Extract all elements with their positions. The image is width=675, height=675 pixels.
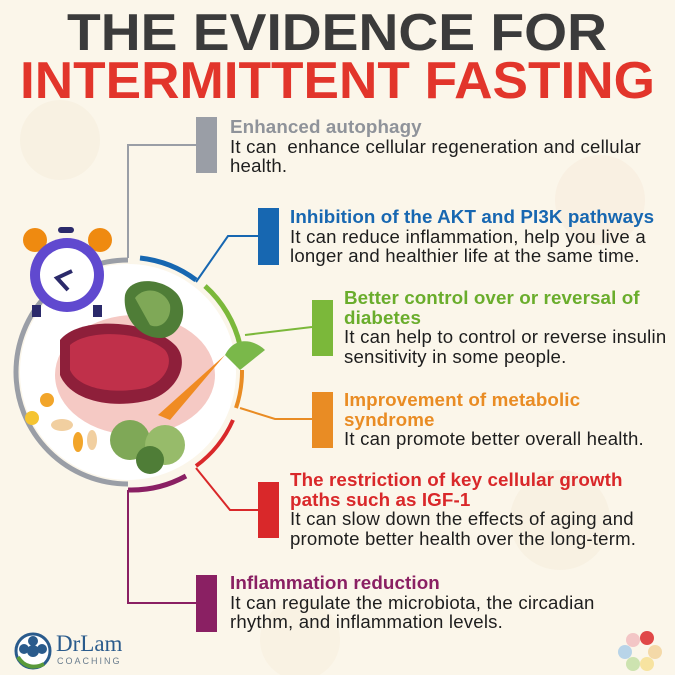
item: enhanced autophagy: It can enhance cellular regeneration and cellular [230, 136, 641, 156]
item: inflammation reduction [196, 572, 595, 632]
item: inflammation reduction: Inflammation reduction [230, 572, 440, 593]
icon: nuts [25, 393, 97, 452]
logo: DrLam Coaching [14, 631, 122, 670]
item: metabolic syndrome: syndrome [344, 408, 435, 430]
item: enhanced autophagy: health. [230, 155, 287, 176]
icon: brussels sprouts [110, 420, 185, 474]
item: diabetes: sensitivity in some people. [344, 346, 566, 366]
item: AKT PI3K: Inhibition of the AKT and PI3K pathways [290, 206, 654, 227]
item: metabolic syndrome: Improvement of metabolic [344, 389, 580, 410]
item: enhanced autophagy: Enhanced autophagy [230, 116, 422, 137]
title [20, 4, 655, 110]
item: AKT PI3K: It can reduce inflammation, help you live a [290, 226, 646, 246]
icon: flower logo [618, 631, 662, 671]
icon: meat [55, 315, 215, 435]
item: diabetes: Better control over or reversal of [344, 287, 640, 308]
item: AKT PI3K: longer and healthier life at the same time. [290, 245, 640, 266]
item: IGF-1: promote better health over the long-term. [290, 528, 636, 548]
logo: DrLam Coaching: DrLam [56, 631, 122, 656]
item: IGF-1: The restriction of key cellular growth [290, 469, 623, 490]
item: diabetes: It can help to control or reverse insulin [344, 326, 666, 347]
item: inflammation reduction: It can regulate the microbiota, the circadian [230, 592, 595, 612]
icon: alarm clock [23, 227, 112, 317]
item: IGF-1: paths such as IGF-1 [290, 488, 470, 510]
item: AKT PI3K [258, 206, 654, 266]
logo: DrLam Coaching: COACHING [57, 656, 122, 666]
item: IGF-1: It can slow down the effects of aging and [290, 508, 634, 529]
title: INTERMITTENT FASTING [20, 52, 655, 110]
plate [16, 258, 242, 490]
item: inflammation reduction: rhythm, and inflammation levels. [230, 611, 503, 632]
item: diabetes [312, 287, 666, 367]
item: metabolic syndrome [312, 389, 644, 449]
item: diabetes: diabetes [344, 306, 421, 328]
item: metabolic syndrome: It can promote better overall health. [344, 428, 644, 449]
icon: carrot [158, 341, 265, 420]
item: IGF-1 [258, 469, 636, 549]
item: enhanced autophagy [196, 116, 641, 176]
title: THE EVIDENCE FOR [67, 4, 607, 62]
icon: lettuce [125, 281, 183, 338]
